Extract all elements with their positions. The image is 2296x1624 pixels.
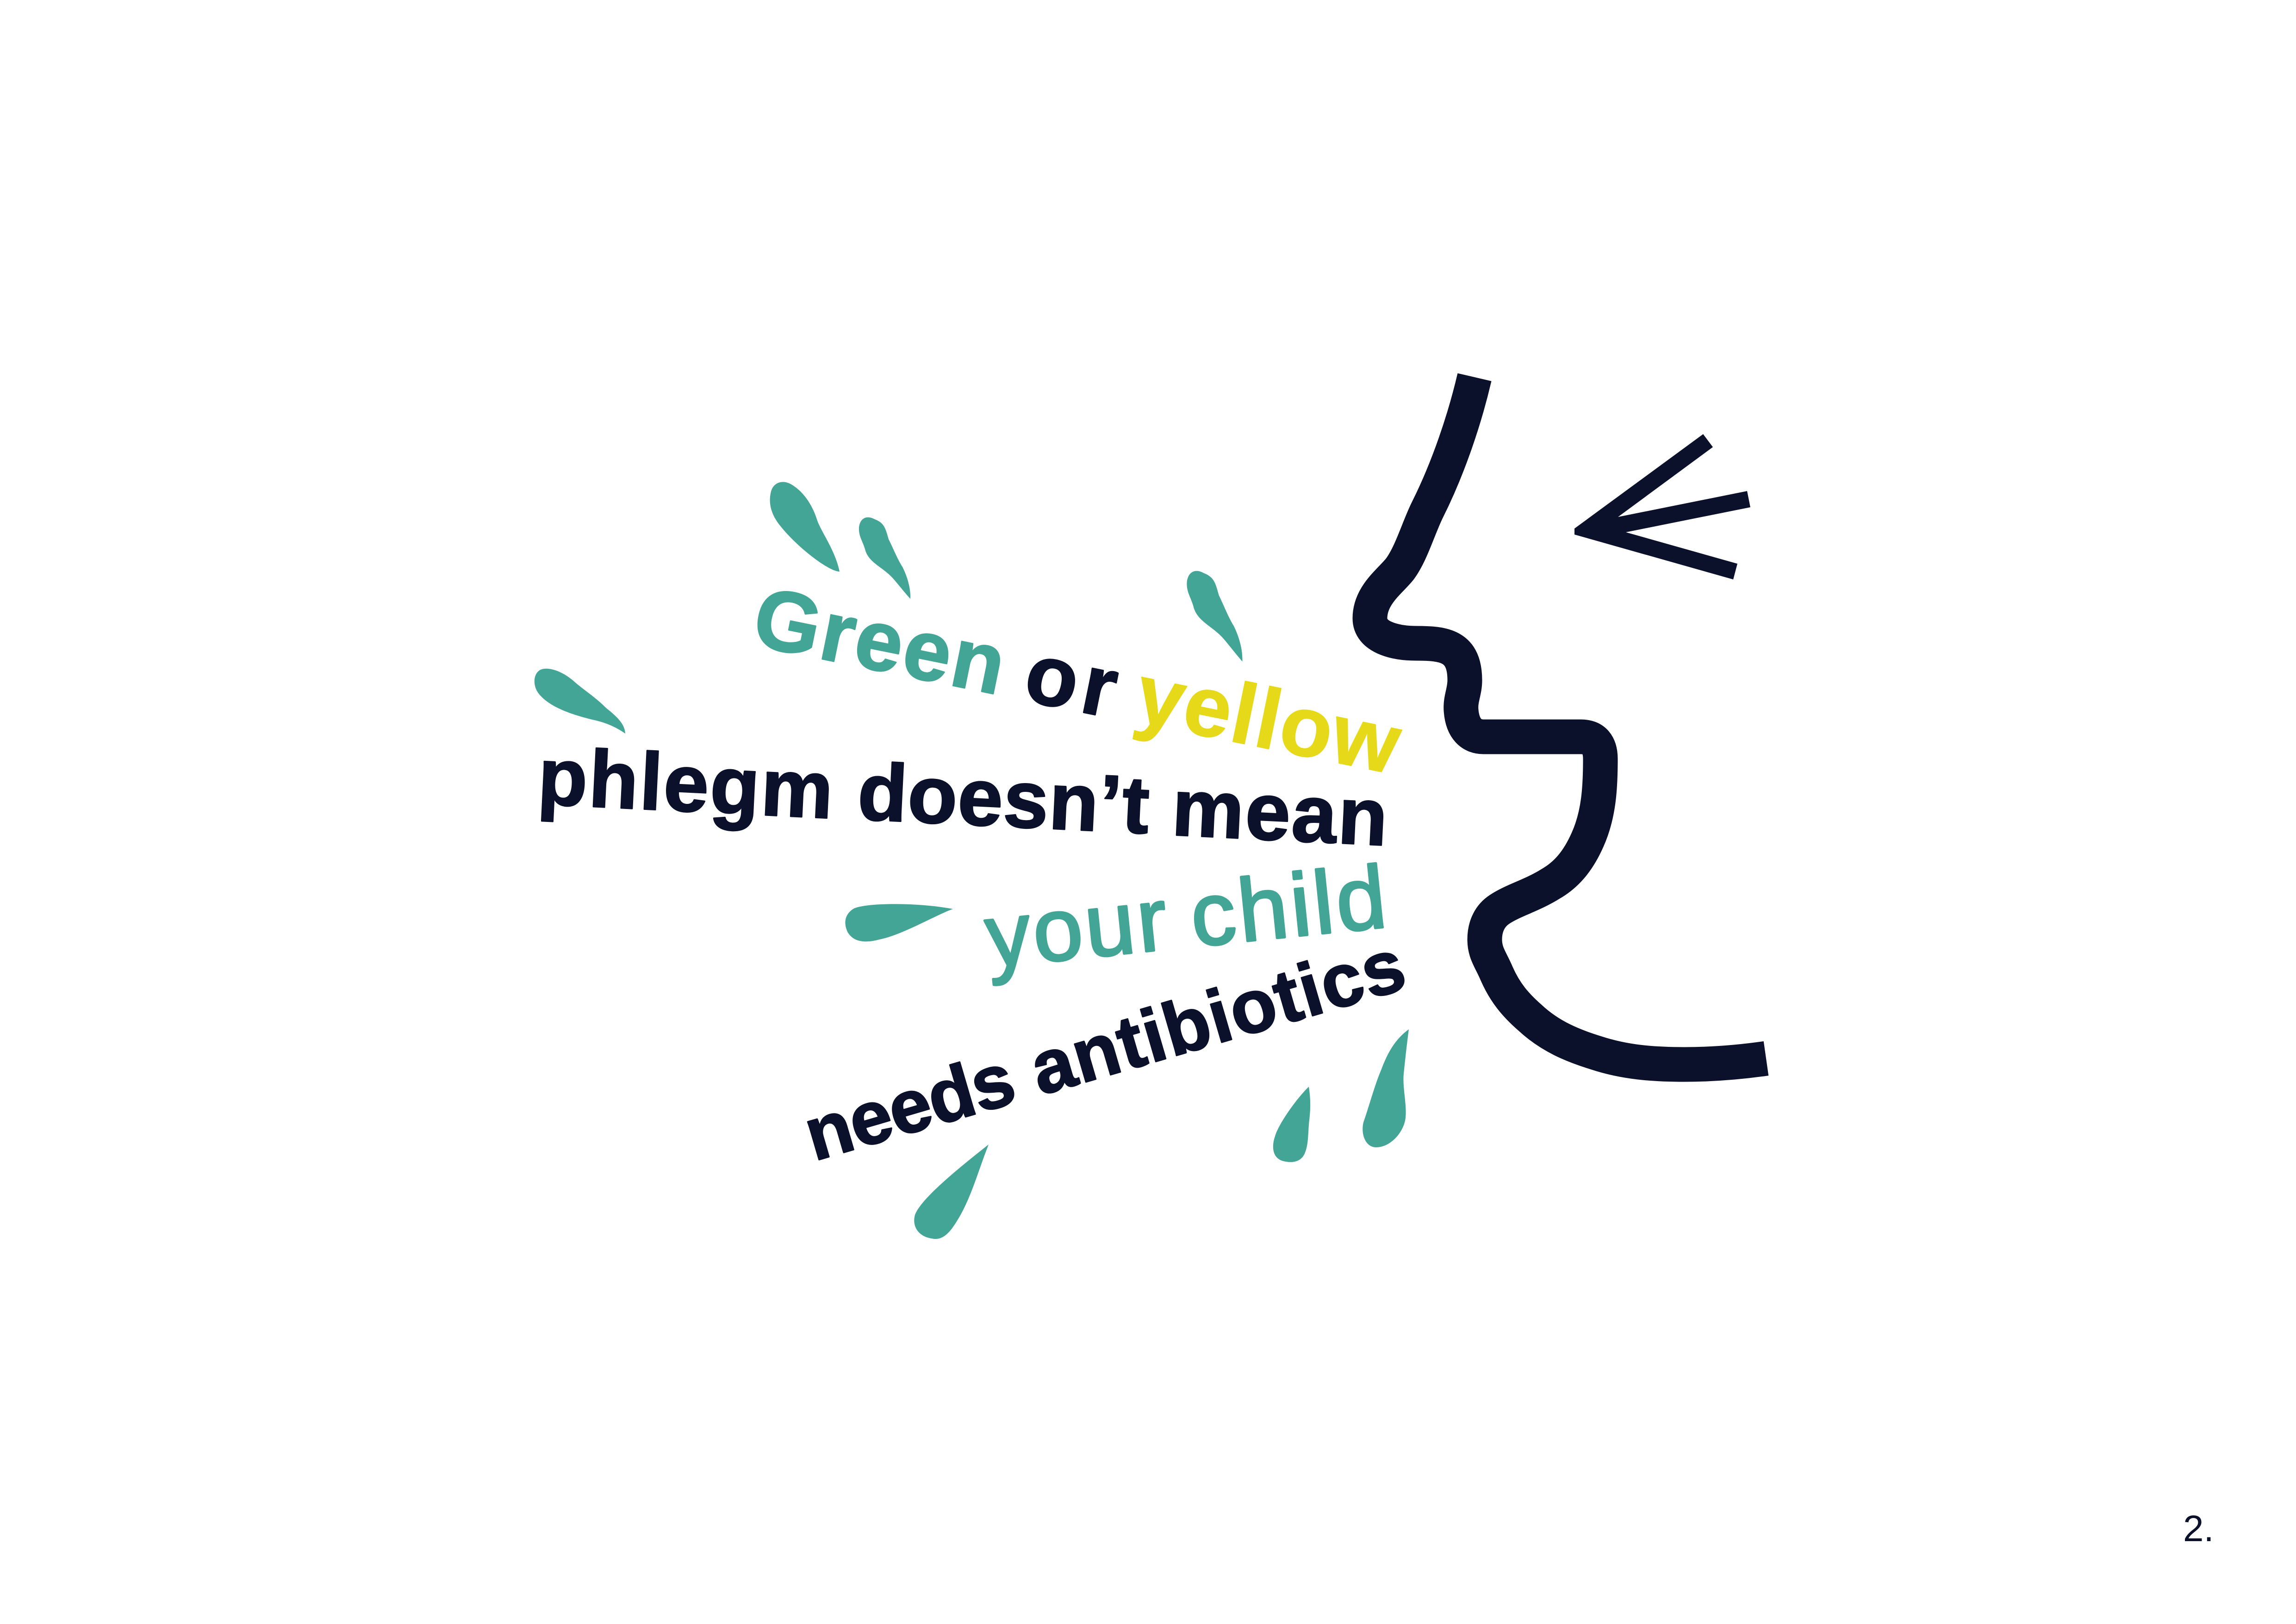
text line: Green or yellow <box>746 568 1409 792</box>
text line: needs antibiotics: needs <box>795 1036 1024 1177</box>
text line: phlegm doesn't mean <box>536 731 1390 863</box>
text line: your child: child <box>1186 846 1390 965</box>
text line: Green or yellow: yellow <box>1128 645 1409 792</box>
text line: needs antibiotics: antibiotics <box>1021 922 1414 1111</box>
droplet: far left <box>535 669 625 734</box>
text line: phlegm doesn't mean: mean <box>1170 762 1390 863</box>
droplet: bottom right <box>1363 1029 1409 1147</box>
text line: your child: your <box>981 869 1171 986</box>
text line: needs antibiotics <box>795 922 1414 1177</box>
text line: Green or yellow: Green <box>746 568 1014 712</box>
icon: face profile <box>1370 377 1766 1064</box>
text line: your child <box>981 846 1390 986</box>
droplet: top centre <box>1187 571 1242 661</box>
text line: phlegm doesn't mean: phlegm <box>536 731 835 836</box>
text line: Green or yellow: or <box>1018 624 1126 735</box>
droplet: top left small <box>859 517 910 599</box>
icon: shout lines <box>1574 434 1750 579</box>
droplet: top left large <box>770 482 840 572</box>
text line: phlegm doesn't mean: doesn’t <box>856 747 1151 851</box>
icon: droplets <box>535 482 1409 1239</box>
droplet: bottom left <box>914 1145 989 1239</box>
droplet: middle left <box>845 904 953 941</box>
droplet: bottom centre <box>1273 1087 1310 1162</box>
page number: 2. <box>2183 1508 2214 1549</box>
